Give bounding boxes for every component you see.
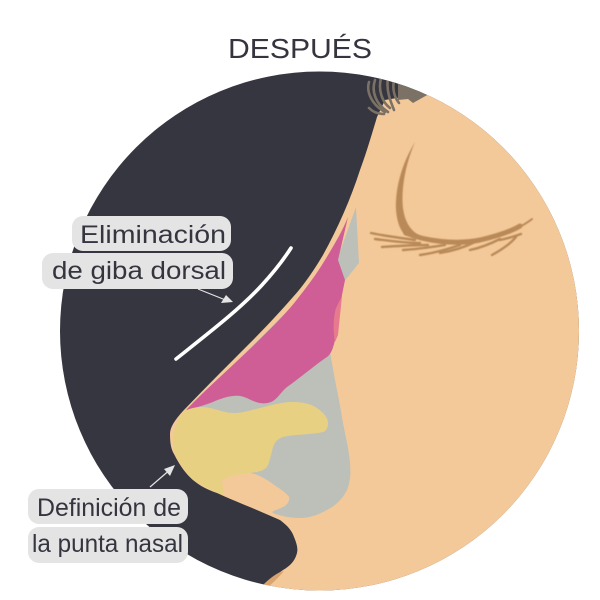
lower lip shadow <box>263 571 284 587</box>
white dorsal line <box>176 248 291 359</box>
bubble: definición de: Definición de <box>37 494 181 522</box>
title: DESPUÉS <box>228 33 372 64</box>
nostril <box>222 473 289 520</box>
bubble: eliminación <box>72 216 231 251</box>
dorsal bone pink <box>186 217 348 410</box>
alar cartilage yellow <box>173 402 328 496</box>
nose cartilage gray <box>187 305 350 518</box>
bubble: de giba dorsal: de giba dorsal <box>52 257 226 285</box>
arrow: punta <box>150 465 175 487</box>
bubble: eliminación: Eliminación <box>80 221 226 249</box>
pink highlight <box>334 296 342 342</box>
eyelashes <box>371 219 532 255</box>
arrow: giba <box>198 289 233 303</box>
face skin <box>170 94 579 590</box>
eyebrow crease <box>396 142 420 236</box>
bubble: de giba dorsal <box>42 253 233 289</box>
bubble: la punta nasal: la punta nasal <box>32 530 183 558</box>
hair <box>368 78 429 114</box>
dark background <box>55 68 585 598</box>
upper gray sliver <box>337 207 359 283</box>
